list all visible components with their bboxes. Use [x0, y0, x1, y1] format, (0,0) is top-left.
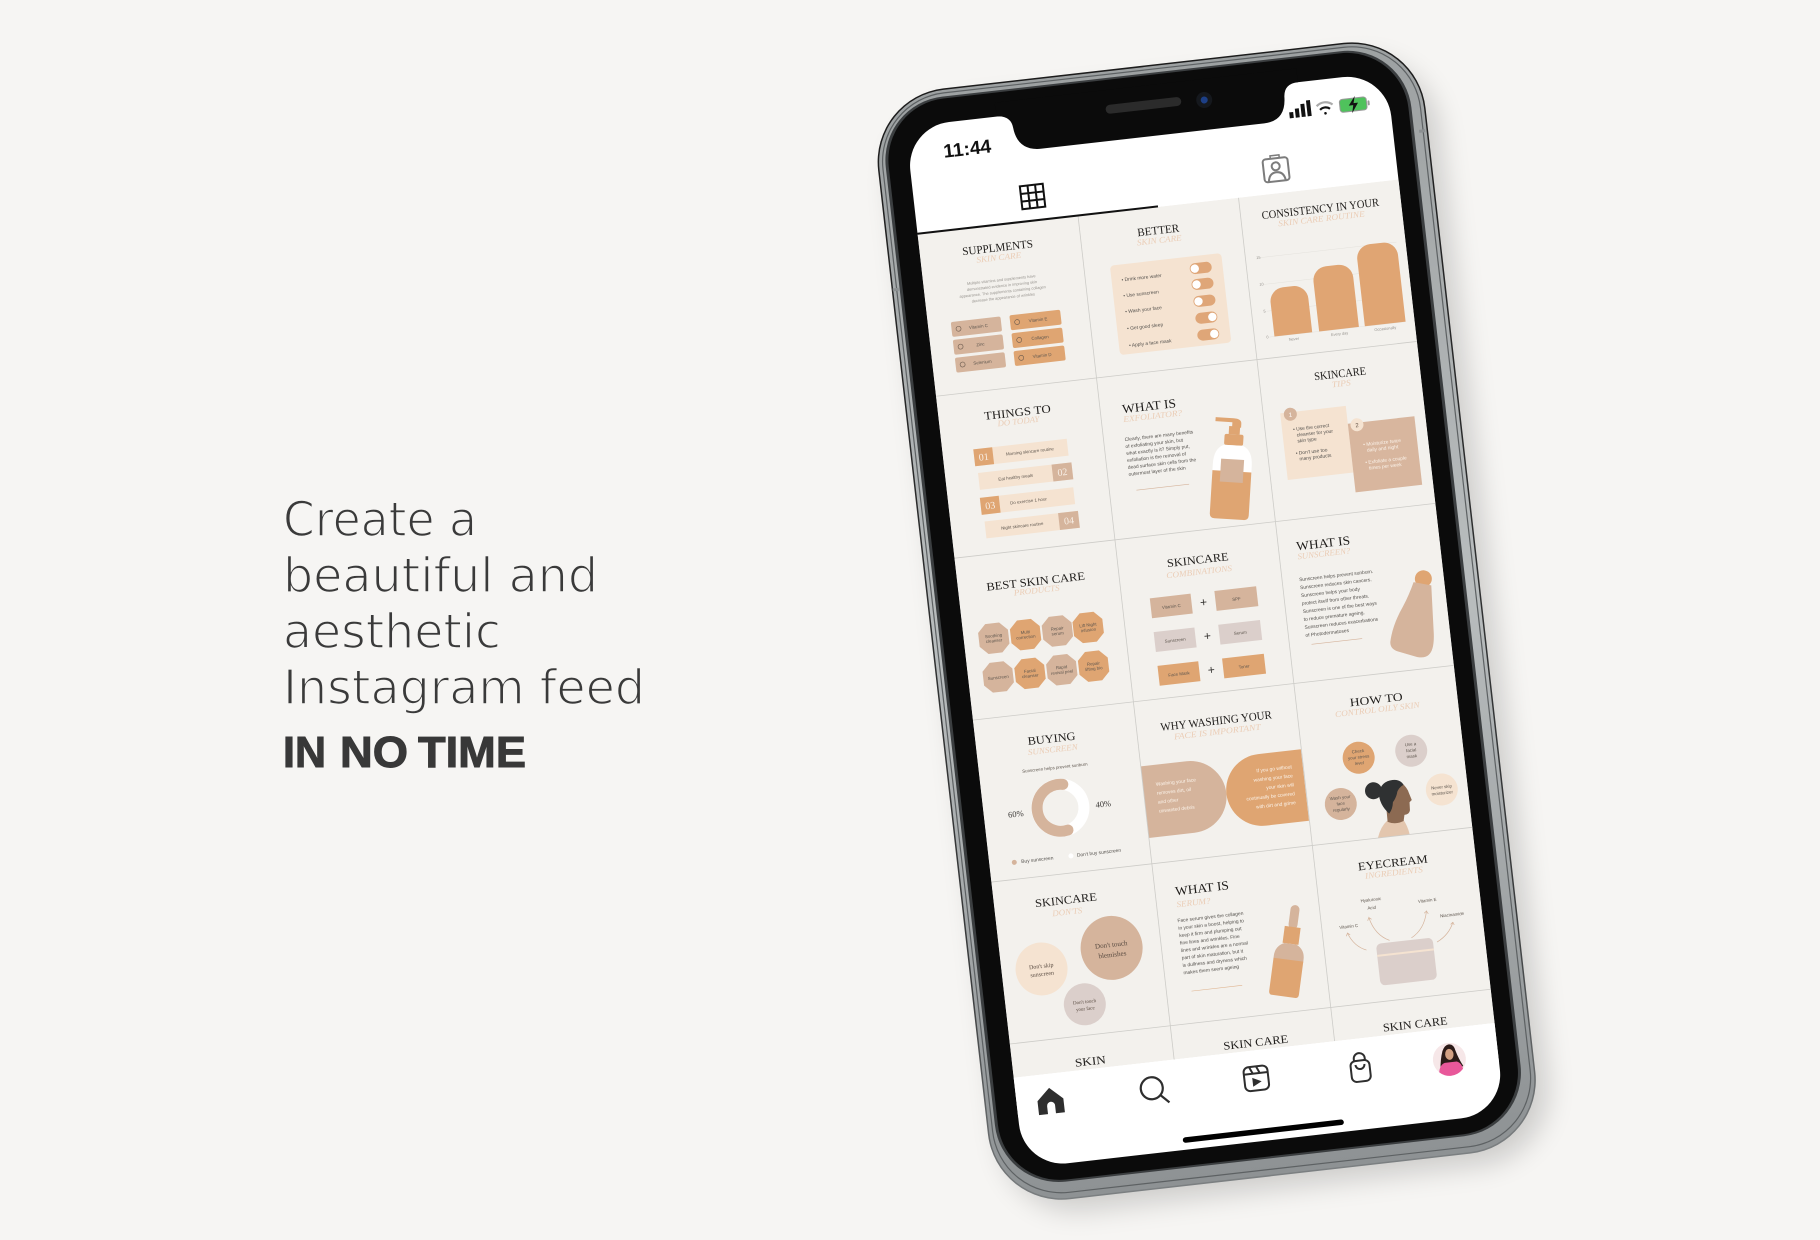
icon: cream jar: [1376, 938, 1437, 986]
ingredient tags: Zinc: [976, 341, 986, 347]
tip card two: 2: [1355, 423, 1360, 429]
tip card two: • Exfoliate a couple: [1365, 455, 1407, 466]
post: eyecream ingredients: [1339, 855, 1464, 986]
screen: [905, 72, 1505, 1168]
numbered list: 03: [985, 500, 996, 512]
icon: pump bottle: [1210, 417, 1255, 520]
left shape: and other: [1158, 797, 1179, 806]
body text: [1177, 911, 1251, 976]
combination pairs: Sunscreen: [1164, 636, 1186, 644]
headline text: Create a: [283, 492, 477, 548]
body text: of exfoliating your skin, but: [1125, 437, 1184, 450]
ingredient labels: Acid: [1367, 905, 1377, 911]
active tab underline: [917, 205, 1158, 235]
tip circles: [1324, 734, 1458, 820]
octagon product badges: serum: [1051, 630, 1064, 637]
bubbles: Don't touch: [1073, 999, 1097, 1007]
post: skincare tips: [1280, 367, 1422, 492]
tip card one: [1280, 401, 1353, 480]
post: what is exfoliator: WHAT IS: [1121, 396, 1177, 416]
post: buying sunscreen: SUNSCREEN: [1027, 741, 1080, 757]
headline text: aesthetic: [283, 604, 501, 660]
ingredient labels: Vitamin C: [1339, 923, 1358, 930]
tip circles: Use a: [1404, 741, 1417, 747]
post: best skin care products: PRODUCTS: [1012, 582, 1061, 598]
home indicator: [1183, 1119, 1344, 1143]
chart legend: Buy sunscreen: [1021, 855, 1054, 865]
left shape: [1141, 757, 1230, 838]
post: better skin care: BETTER: [1137, 223, 1180, 239]
octagon product badges: Repair: [1050, 625, 1064, 632]
post: skincare combinations: SKINCARE: [1166, 551, 1229, 570]
combination pairs: +: [1207, 662, 1216, 677]
bubbles: sunscreen: [1030, 971, 1054, 979]
body text: what exactly is it? Simply put,: [1126, 444, 1190, 457]
numbered list: Morning skincare routine: [1006, 446, 1055, 457]
bubbles: Don't skip: [1029, 963, 1054, 971]
nav icon: home: [1036, 1086, 1065, 1115]
tip circles: Check: [1351, 748, 1365, 754]
post: supplements: SUPPLMENTS: [962, 238, 1034, 258]
tip card one: cleanser for your: [1296, 428, 1334, 439]
left shape: removes dirt, oil: [1157, 787, 1192, 797]
post: why washing your face: [1136, 706, 1309, 839]
post: how to control oily skin: CONTROL OILY SKIN: [1335, 699, 1422, 719]
bar chart: 15: [1256, 255, 1261, 260]
octagon product badges: Lift Night: [1079, 621, 1098, 628]
body text: Face serum gives the collagen: [1177, 911, 1244, 924]
illustration: woman profile: [1365, 780, 1412, 838]
body text: [1299, 569, 1380, 639]
octagon product badges: infusion: [1081, 627, 1097, 633]
post: supplements: Multiple vitamins and supplements have: [967, 273, 1036, 286]
combination pairs: SPF: [1232, 596, 1241, 602]
bar chart: 10: [1259, 281, 1265, 287]
checklist card: • Wash your face: [1125, 305, 1162, 315]
icon: sunscreen bottle: [1390, 570, 1434, 658]
ingredient labels: Niacinamide: [1440, 911, 1465, 918]
checklist card: [1110, 253, 1231, 355]
post: best skin care products: [972, 569, 1110, 694]
ingredient tags: Vitamin D: [1032, 352, 1052, 359]
bar chart: 0: [1266, 334, 1270, 339]
post: supplements: SKIN CARE: [976, 250, 1022, 265]
icon: dropper bottle: [1269, 905, 1304, 998]
left shape: unwanted debris: [1159, 805, 1196, 815]
body text: makes them seem ageing: [1183, 964, 1240, 976]
ingredient labels: [1339, 897, 1464, 929]
post: skincare donts: DON'TS: [1051, 905, 1083, 918]
post: skincare tips: SKINCARE: [1314, 365, 1367, 383]
tip circles: face: [1336, 801, 1346, 806]
body text: dead surface skin cells from the: [1128, 457, 1197, 471]
right shape: If you go without: [1256, 764, 1293, 774]
nav avatar: [1431, 1041, 1468, 1078]
tip card two: times per week: [1369, 462, 1403, 472]
octagon product badges: cleanser: [1022, 672, 1039, 679]
post: best skin care products: BEST SKIN CARE: [986, 571, 1086, 594]
octagon product badges: Soothing: [985, 632, 1003, 639]
post: skin care partial middle: SKIN CARE: [1223, 1034, 1289, 1053]
post: better skin care: SKIN CARE: [1136, 232, 1183, 247]
post: buying sunscreen: [1008, 732, 1121, 865]
post: eyecream ingredients: EYECREAM: [1357, 854, 1428, 873]
combination pairs: [1150, 586, 1266, 686]
donut chart: 40%: [1095, 798, 1112, 810]
tip card one: skin type: [1297, 436, 1317, 445]
donut chart: 60%: [1008, 808, 1024, 820]
headline text: IN: [283, 728, 326, 777]
octagon product badges: Facial: [1024, 668, 1036, 674]
status signal icon: [1288, 100, 1312, 118]
post: what is exfoliator: EXFOLIATOR?: [1122, 407, 1183, 424]
ingredient tags: Vitamin E: [1028, 316, 1048, 323]
post: supplements: demonstrated evidence in improving skin: [967, 279, 1037, 292]
octagon product badges: Sunscreen: [988, 674, 1010, 681]
chart legend: [1012, 849, 1121, 865]
ingredient tags: Vitamin C: [969, 323, 988, 330]
checklist card: • Use sunscreen: [1123, 289, 1160, 299]
post: what is serum: [1174, 881, 1304, 998]
post: eyecream ingredients: INGREDIENTS: [1363, 864, 1424, 881]
nav icon: reels: [1243, 1065, 1270, 1092]
checklist card: • Get good sleep: [1127, 322, 1164, 332]
bubbles: your face: [1076, 1006, 1096, 1013]
tip card two: • Moisturize twice: [1363, 438, 1402, 448]
right shape: with dirt and grime: [1256, 800, 1297, 811]
octagon product badges: Repair: [1087, 660, 1101, 667]
post: buying sunscreen: BUYING: [1027, 731, 1076, 748]
body text: outermost layer of the skin: [1128, 465, 1186, 478]
post: skincare combinations: [1145, 548, 1266, 686]
tip card one: 1: [1289, 412, 1293, 419]
nav icon: search: [1140, 1076, 1169, 1105]
octagon product badges: Multi: [1020, 629, 1030, 635]
headline text: Instagram feed: [283, 660, 645, 716]
bubbles: blemishes: [1098, 949, 1127, 960]
body text: of Photodermatoses: [1305, 628, 1350, 639]
right shape: continually be covered: [1246, 791, 1296, 803]
bottom nav bar: [1014, 1023, 1499, 1118]
octagon product badges: cleanser: [986, 637, 1003, 644]
post: skin care partial right: SKIN CARE: [1382, 1015, 1448, 1035]
ingredient tags: Collagen: [1031, 334, 1050, 341]
notch: [994, 68, 1302, 153]
tip circles: your stress: [1348, 753, 1370, 761]
body text: exfoliation is the removal of: [1127, 451, 1187, 464]
ingredient tags: [951, 310, 1066, 373]
arrows: [1346, 910, 1454, 950]
tip card two: daily and night: [1367, 444, 1399, 454]
bar chart: Never: [1288, 336, 1300, 342]
tip circles: regularly: [1333, 806, 1351, 813]
tab icon: grid: [1020, 184, 1045, 209]
body text: Sunscreen is one of the best ways: [1302, 601, 1378, 615]
ingredient labels: Vitamin E: [1418, 897, 1437, 904]
bar chart: [1256, 239, 1406, 345]
left shape: Washing your face: [1156, 777, 1197, 788]
body text: Sunscreen reduces exacerbations: [1304, 617, 1379, 631]
tip circles: moisturizer: [1431, 789, 1454, 797]
headline text: TIME: [418, 728, 526, 777]
body text: [1124, 429, 1198, 478]
chart legend: Don't buy sunscreen: [1077, 848, 1122, 859]
body text: in your skin a boost, helping to: [1178, 918, 1245, 932]
body text: fine lines and wrinkles. Fine: [1180, 934, 1240, 947]
post: supplements: appearance. The supplements containing collagen: [959, 284, 1046, 299]
ingredient labels: Hyaluronic: [1360, 896, 1382, 903]
post: skincare donts: SKINCARE: [1035, 891, 1097, 910]
checklist card: • Apply a face mask: [1129, 338, 1172, 349]
post: what is exfoliator: [1122, 399, 1252, 520]
nav icon: shop bag: [1349, 1052, 1371, 1083]
phone shadow: [885, 53, 1555, 1218]
tip circles: mask: [1406, 753, 1418, 759]
tip circles: Never skip: [1431, 783, 1453, 791]
body text: lines and wrinkles are a normal: [1181, 940, 1248, 954]
combination pairs: Toner: [1238, 663, 1250, 670]
numbered list: 01: [978, 452, 989, 464]
tip circles: Wash your: [1329, 794, 1351, 801]
antenna marks: [881, 129, 1436, 291]
status battery icon: [1339, 94, 1371, 115]
body text: is dullness and dryness which: [1182, 956, 1248, 969]
post: how to control oily skin: [1324, 693, 1458, 838]
headline text: [283, 492, 645, 777]
octagon product badges: revival peel: [1051, 668, 1073, 676]
body text: Sunscreen helps prevent sunburn.: [1299, 569, 1374, 583]
right shape: [1222, 749, 1309, 830]
post: what is sunscreen: [1296, 536, 1434, 658]
phone frame: [870, 34, 1544, 1208]
post: better skin care: [1106, 218, 1231, 355]
post: skincare combinations: COMBINATIONS: [1166, 563, 1233, 580]
post: what is sunscreen: SUNSCREEN?: [1297, 545, 1351, 561]
post: things to do today: THINGS TO: [984, 403, 1051, 423]
post: skincare donts: [1016, 892, 1143, 1026]
post: why washing your face: FACE IS IMPORTANT: [1172, 721, 1262, 742]
checklist card: • Drink more water: [1121, 273, 1162, 283]
numbered list: Eat healthy meals: [998, 473, 1034, 482]
body text: Sunscreen reduces skin cancers.: [1300, 577, 1372, 591]
tip circles: facial: [1406, 747, 1417, 753]
bar chart: Every day: [1331, 330, 1348, 337]
octagon product badges: [977, 611, 1110, 694]
post: how to control oily skin: HOW TO: [1349, 691, 1403, 709]
post: why washing your face: WHY WASHING YOUR: [1160, 709, 1273, 734]
numbered list: Do exercise 1 hour: [1010, 496, 1048, 506]
post: what is sunscreen: WHAT IS: [1296, 533, 1351, 553]
bar chart: Occasionally: [1374, 325, 1397, 332]
body text: part of skin maturation, but it: [1181, 948, 1244, 962]
combination pairs: Face Mask: [1168, 670, 1191, 678]
post: buying sunscreen: Sunscreen helps prevent sunburn: [1022, 761, 1088, 774]
body text: to reduce premature ageing.: [1303, 610, 1365, 623]
post: what is serum: SERUM?: [1176, 895, 1212, 909]
numbered list: 04: [1063, 515, 1075, 528]
post: things to do today: DO TODAY: [996, 414, 1041, 429]
body text: Clearly, there are many benefits: [1124, 429, 1194, 443]
tab icon: tagged profile: [1262, 154, 1290, 183]
numbered list: [973, 438, 1080, 539]
post: consistency: [1251, 195, 1406, 345]
tip card one: • Don't use too: [1296, 447, 1328, 457]
tip card one: many products: [1299, 453, 1332, 462]
post: things to do today: [969, 402, 1080, 539]
numbered list: Night skincare routine: [1001, 521, 1044, 531]
headline text: beautiful and: [283, 548, 598, 604]
combination pairs: Vitamin C: [1162, 603, 1181, 610]
post: skin partial: SKIN: [1074, 1054, 1107, 1070]
donut chart: [1005, 779, 1114, 837]
ingredient tags: Selenium: [973, 359, 992, 366]
tip card one: • Use the correct: [1293, 423, 1330, 433]
body text: protect itself from other threats.: [1302, 593, 1370, 607]
tip card two: [1347, 412, 1422, 492]
combination pairs: +: [1199, 595, 1208, 610]
status time: 11:44: [942, 136, 993, 163]
octagon product badges: Rapid: [1056, 664, 1068, 670]
bubbles: [1016, 916, 1143, 1026]
right shape: washing your face: [1253, 773, 1293, 784]
body text: keep it firm and plumping out: [1179, 926, 1243, 939]
headline text: NO: [340, 728, 408, 777]
body text: Sunscreen helps your body: [1301, 586, 1361, 599]
post: what is serum: WHAT IS: [1174, 878, 1230, 898]
feed grid: [918, 179, 1497, 1078]
bar chart: 5: [1263, 308, 1266, 314]
octagon product badges: lifting bio: [1085, 665, 1103, 672]
post: supplements: decrease the appearance of wrinkles: [971, 291, 1035, 304]
combination pairs: Serum: [1234, 630, 1247, 636]
numbered list: 02: [1057, 467, 1068, 479]
post: supplements: [942, 236, 1066, 373]
right shape: your skin will: [1266, 782, 1294, 791]
post: consistency: SKIN CARE ROUTINE: [1278, 208, 1366, 228]
phone mockup: [870, 33, 1555, 1220]
status wifi icon: [1316, 101, 1334, 116]
octagon product badges: correction: [1016, 633, 1036, 641]
bubbles: Don't touch: [1095, 939, 1128, 951]
combination pairs: +: [1203, 629, 1212, 643]
post: consistency: CONSISTENCY IN YOUR: [1261, 197, 1380, 222]
post: skincare tips: TIPS: [1331, 377, 1352, 389]
tip circles: level: [1355, 760, 1364, 766]
